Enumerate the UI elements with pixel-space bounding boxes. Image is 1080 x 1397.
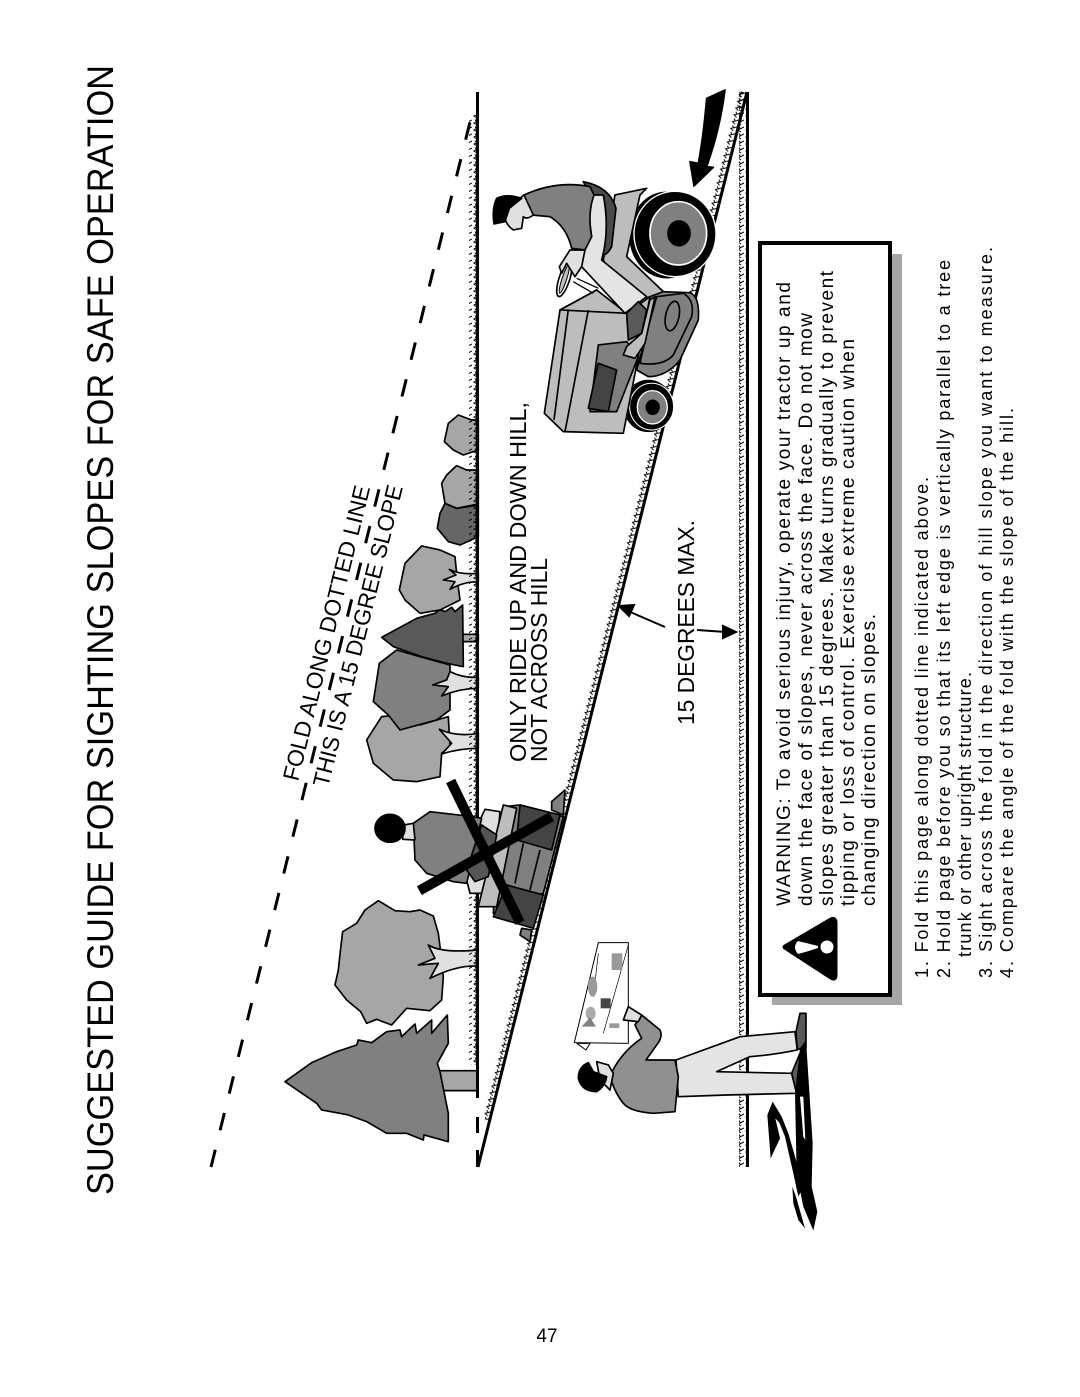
front wheel bbox=[624, 381, 674, 431]
folded page bbox=[574, 943, 628, 1050]
tree 2 bbox=[442, 466, 478, 508]
torso and arm bbox=[610, 1015, 678, 1113]
icon: arrow down slope bbox=[690, 90, 725, 186]
lower ground grass strip bbox=[739, 92, 747, 1167]
slope label text: THIS IS A 15 DEGREE SLOPE bbox=[308, 482, 408, 789]
seat base bbox=[603, 188, 663, 300]
text: numbered instructions: trunk or other upright structure. bbox=[955, 672, 975, 957]
lower trees bbox=[285, 901, 478, 1142]
fender bbox=[637, 292, 699, 377]
tree 7 bbox=[367, 715, 478, 782]
tractor going up and down hill bbox=[493, 90, 725, 433]
driver head bbox=[493, 195, 533, 230]
warning text: changing direction on slopes. bbox=[859, 614, 880, 906]
warning text bbox=[774, 270, 880, 906]
warning text: tipping or loss of control. Exercise extreme caution when bbox=[838, 339, 859, 906]
tractor across hill with X bbox=[375, 781, 565, 942]
shoes bbox=[792, 1013, 806, 1093]
slope grass strip bbox=[482, 90, 746, 1121]
icon: warning triangle bbox=[785, 919, 835, 978]
hood bbox=[544, 290, 650, 433]
tree 3 bbox=[437, 503, 478, 545]
text: ride direction bbox=[505, 402, 552, 762]
warning text: slopes greater than 15 degrees. Make turns gradually to prevent bbox=[817, 270, 838, 906]
driver torso and arm bbox=[524, 185, 594, 250]
upper trees row bbox=[367, 415, 478, 782]
steering wheel bbox=[554, 260, 598, 298]
tree 1 bbox=[444, 415, 478, 455]
hood bands bbox=[478, 805, 563, 913]
text: numbered instructions: 3. Sight across the fold in the direction of hill slope you want to measure. bbox=[976, 247, 996, 978]
dashed fold line bbox=[211, 118, 471, 1167]
fold label text: FOLD ALONG DOTTED LINE bbox=[278, 483, 375, 783]
text: ride direction: ONLY RIDE UP AND DOWN HILL, bbox=[505, 402, 531, 762]
text: numbered instructions bbox=[912, 247, 1017, 978]
box shadow bbox=[772, 254, 902, 1005]
text: numbered instructions: 2. Hold page before you so that its left edge is vertically parallel to a tree bbox=[934, 260, 954, 978]
driver back view bbox=[413, 812, 482, 883]
rear wheel bbox=[630, 191, 716, 278]
warning box bbox=[760, 243, 890, 995]
footrest bbox=[623, 297, 655, 358]
seat and fender bbox=[465, 809, 500, 893]
legs bbox=[676, 1032, 797, 1097]
warning text: down the face of slopes, never across the face. Do not mow bbox=[796, 313, 817, 906]
page number: 47 bbox=[536, 1326, 558, 1347]
neck and face bbox=[597, 1062, 613, 1090]
top grass strip bbox=[469, 115, 477, 1065]
text: numbered instructions: 4. Compare the angle of the fold with the slope of the hill. bbox=[997, 408, 1017, 978]
seat back bbox=[583, 182, 616, 255]
tree 5 conifer bbox=[382, 605, 478, 667]
conifer tree bbox=[285, 1015, 478, 1142]
lower tire bbox=[493, 885, 543, 928]
head bbox=[375, 814, 405, 842]
panel: warning bbox=[760, 243, 902, 1005]
hand bbox=[559, 250, 585, 277]
round tree bbox=[335, 901, 478, 1025]
tree 4 bbox=[399, 546, 478, 613]
shadow of person bbox=[767, 1040, 817, 1231]
person sighting the slope bbox=[574, 943, 806, 1113]
text: 15 degrees max: 15 DEGREES MAX. bbox=[673, 520, 699, 725]
text: ride direction: NOT ACROSS HILL bbox=[526, 558, 552, 762]
legs bbox=[582, 195, 647, 313]
shoe bbox=[627, 302, 647, 340]
text: numbered instructions: 1. Fold this page along dotted line indicated above. bbox=[912, 477, 932, 978]
upper tire bbox=[517, 805, 560, 850]
X mark bbox=[419, 781, 552, 923]
neck bbox=[403, 823, 415, 840]
arrows: degree measurement bbox=[619, 605, 736, 638]
steering panel bbox=[467, 825, 497, 882]
front axle bbox=[552, 790, 565, 815]
tree 6 bbox=[373, 650, 478, 730]
warning text: WARNING: To avoid serious injury, operate your tractor up and bbox=[774, 282, 795, 906]
hand bbox=[623, 1007, 642, 1022]
hair bbox=[578, 1063, 607, 1092]
ground lines bbox=[478, 92, 748, 1167]
